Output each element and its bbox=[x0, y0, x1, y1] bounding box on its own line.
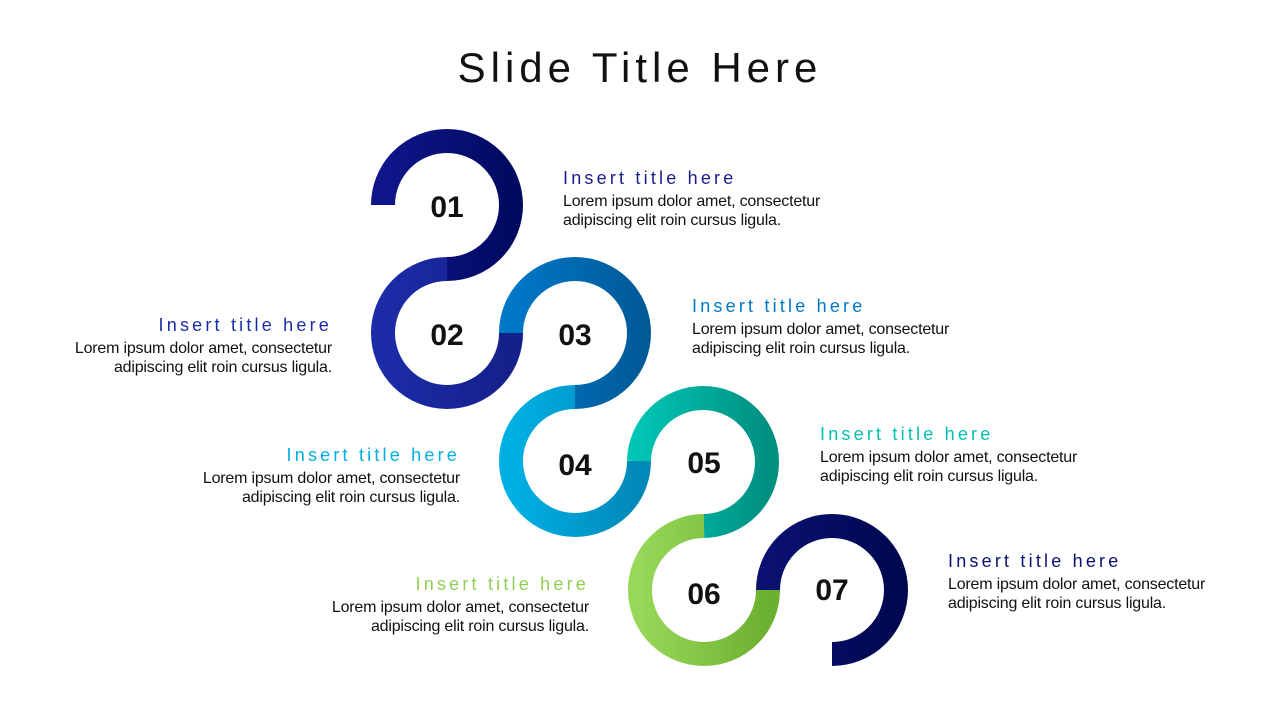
text 02: Lorem ipsum dolor amet, consectetur bbox=[75, 340, 332, 357]
ring 01: 01 bbox=[430, 191, 464, 224]
text 01: adipiscing elit roin cursus ligula. bbox=[563, 212, 781, 229]
text 06: Insert title here bbox=[416, 574, 589, 594]
ring 03: 03 bbox=[558, 319, 592, 352]
ring 04: 04 bbox=[558, 449, 592, 482]
text 03: Lorem ipsum dolor amet, consectetur bbox=[692, 321, 949, 338]
text 03: adipiscing elit roin cursus ligula. bbox=[692, 340, 910, 357]
ring 07 bbox=[768, 526, 896, 654]
text 07: Lorem ipsum dolor amet, consectetur bbox=[948, 576, 1205, 593]
ring 05: 05 bbox=[687, 447, 721, 480]
text 05: Insert title here bbox=[820, 424, 993, 444]
text 03: Insert title here bbox=[692, 296, 865, 316]
ring 07: 07 bbox=[815, 574, 849, 607]
text 01: Lorem ipsum dolor amet, consectetur bbox=[563, 193, 820, 210]
ring 06: 06 bbox=[687, 578, 721, 611]
ring 02: 02 bbox=[430, 319, 464, 352]
text 07: adipiscing elit roin cursus ligula. bbox=[948, 595, 1166, 612]
text 05: Lorem ipsum dolor amet, consectetur bbox=[820, 449, 1077, 466]
text 04 bbox=[203, 445, 460, 506]
text 01 bbox=[563, 168, 820, 229]
ring 05 bbox=[639, 398, 767, 526]
ring 06 bbox=[640, 526, 768, 654]
text 06: adipiscing elit roin cursus ligula. bbox=[371, 618, 589, 635]
text 06 bbox=[332, 574, 589, 635]
text 01: Insert title here bbox=[563, 168, 736, 188]
text 05 bbox=[820, 424, 1078, 485]
text 04: Insert title here bbox=[287, 445, 460, 465]
text 07 bbox=[948, 551, 1206, 612]
text 07: Insert title here bbox=[948, 551, 1121, 571]
ring 03 bbox=[511, 269, 639, 397]
text 06: Lorem ipsum dolor amet, consectetur bbox=[332, 599, 589, 616]
text 02: adipiscing elit roin cursus ligula. bbox=[114, 359, 332, 376]
ring 02 bbox=[383, 269, 511, 397]
text 04: adipiscing elit roin cursus ligula. bbox=[242, 489, 460, 506]
title: Slide Title Here bbox=[458, 44, 822, 91]
text 03 bbox=[692, 296, 950, 357]
text 05: adipiscing elit roin cursus ligula. bbox=[820, 468, 1038, 485]
text 04: Lorem ipsum dolor amet, consectetur bbox=[203, 470, 460, 487]
ring 04 bbox=[511, 397, 639, 525]
text 02: Insert title here bbox=[159, 315, 332, 335]
text 02 bbox=[75, 315, 332, 376]
ring 01 bbox=[383, 141, 511, 269]
